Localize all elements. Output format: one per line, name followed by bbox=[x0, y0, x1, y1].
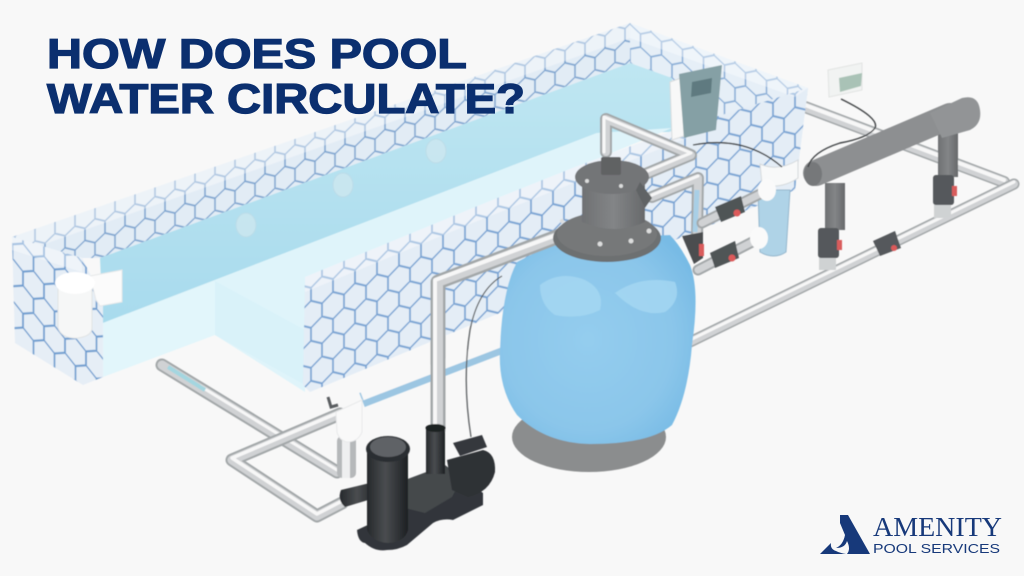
pipe: far right return line behind pool bbox=[805, 105, 1004, 182]
pump volute bbox=[405, 465, 462, 513]
pump outlet bbox=[426, 424, 446, 474]
pipe: pump outlet up to valve bbox=[435, 228, 575, 430]
logo name: AMENITY bbox=[873, 512, 1002, 542]
union on main line bbox=[873, 231, 901, 256]
pipe: under-pool line with blue stripe bbox=[162, 365, 337, 472]
pipe: suction loop to pump bbox=[232, 412, 342, 516]
pool left end wall bbox=[12, 237, 103, 385]
pump base bbox=[357, 483, 483, 550]
title: WATER CIRCULATE? bbox=[47, 75, 525, 122]
pipe: white tee fitting bbox=[328, 397, 362, 478]
controller unit bbox=[670, 65, 722, 140]
cable: panel to UV unit bbox=[808, 99, 876, 167]
cable: controller to canister bbox=[693, 143, 782, 167]
pool back wall inner band bbox=[12, 23, 630, 258]
skimmer bbox=[55, 270, 122, 338]
wall control panel bbox=[828, 63, 862, 97]
UV unit legs bbox=[818, 125, 958, 270]
union valve: lower bbox=[710, 241, 739, 268]
pipe: long main line right bbox=[690, 182, 1014, 342]
pipe: second frame from valve bbox=[652, 176, 698, 238]
pool floor corner: side panel bbox=[215, 281, 305, 385]
pool right end wall bbox=[630, 23, 808, 190]
pool front wall bbox=[303, 88, 808, 392]
logo tagline: POOL SERVICES bbox=[873, 541, 1000, 556]
pool light floor: right side bbox=[103, 128, 672, 392]
filter tank bbox=[500, 235, 696, 444]
pump motor bbox=[447, 450, 495, 497]
pipe: lower valve line bbox=[698, 227, 768, 270]
wall jets bbox=[236, 139, 446, 237]
tank highlights bbox=[540, 276, 677, 317]
fitting on second frame bbox=[682, 232, 704, 264]
strainer housing bbox=[367, 448, 408, 543]
logo mark bbox=[820, 515, 870, 554]
pipe: left main line to tee bbox=[362, 341, 505, 400]
pipe: upper valve line bbox=[702, 179, 776, 223]
strainer lid bbox=[366, 436, 410, 462]
pump inlet bbox=[340, 481, 378, 507]
pool water surface bbox=[100, 63, 672, 323]
pump terminal box bbox=[453, 435, 487, 456]
pump bbox=[340, 424, 495, 550]
filter canister bbox=[758, 160, 798, 256]
pipe: upper frame to filter valve bbox=[604, 117, 691, 175]
union valve: upper bbox=[715, 196, 745, 222]
filter tank base bbox=[512, 402, 666, 472]
title: HOW DOES POOL bbox=[47, 30, 466, 77]
UV unit body bbox=[804, 97, 980, 186]
logo bbox=[820, 512, 1002, 556]
multiport valve bbox=[575, 157, 652, 229]
cable: pump power bbox=[466, 276, 502, 437]
filter flange bbox=[553, 212, 661, 262]
pool rim highlights bbox=[12, 23, 808, 292]
pool light floor: front side bbox=[103, 281, 215, 377]
